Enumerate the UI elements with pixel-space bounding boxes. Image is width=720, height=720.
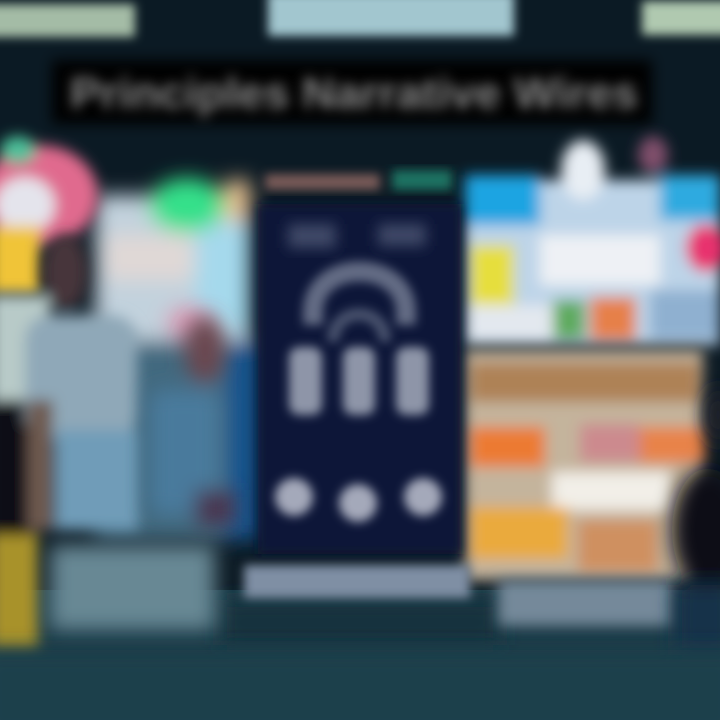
right scene: lower shelves xyxy=(465,350,705,580)
under panel bar xyxy=(244,565,470,598)
floor band xyxy=(0,650,720,720)
left person xyxy=(0,234,138,650)
bottom right counter xyxy=(498,580,673,626)
bottom left counter xyxy=(50,545,215,630)
central phone panel xyxy=(258,204,461,554)
left scene: shelves and signage xyxy=(95,178,260,540)
title: Principles Narrative Wires xyxy=(70,69,638,118)
left umbrella xyxy=(0,136,98,294)
panel background xyxy=(258,204,461,554)
right person xyxy=(672,387,720,655)
title xyxy=(52,60,652,124)
three columns xyxy=(289,347,429,415)
second person xyxy=(150,316,235,525)
right scene: upper shelves xyxy=(465,136,720,345)
three circle buttons xyxy=(275,478,442,522)
arch icon xyxy=(313,272,406,342)
top banners xyxy=(0,0,720,37)
panel header labels xyxy=(288,224,426,248)
panel top accent xyxy=(265,170,452,190)
